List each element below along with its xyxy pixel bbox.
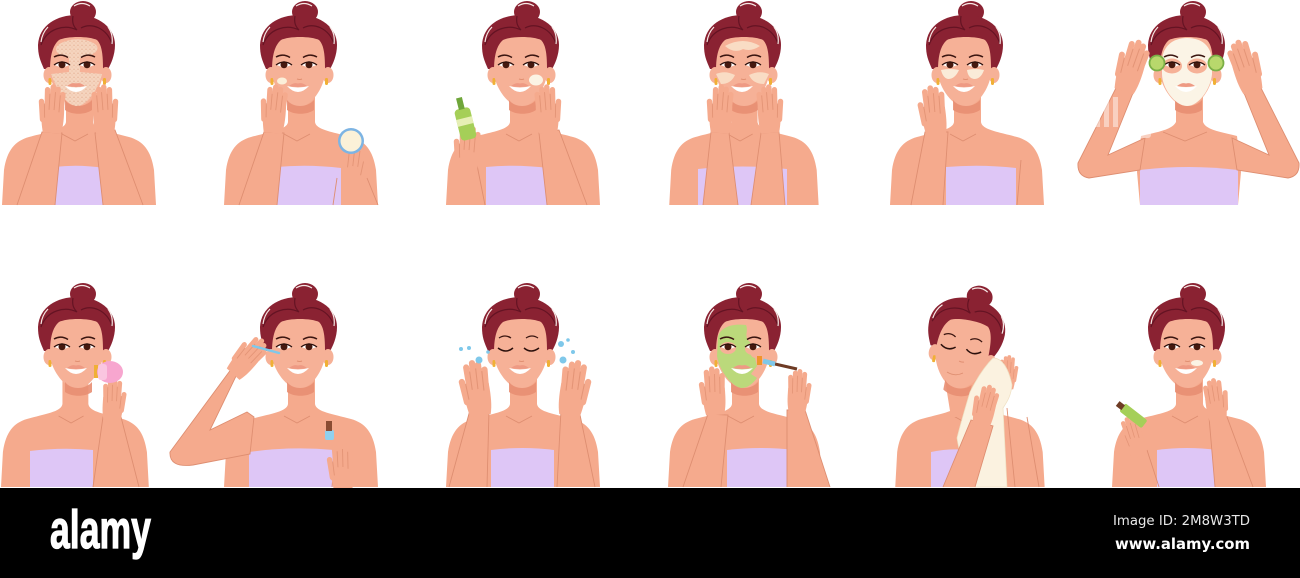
footer bar	[0, 488, 1300, 578]
towel	[249, 448, 334, 487]
left raised arm	[1078, 86, 1145, 178]
towel	[486, 166, 548, 205]
pink cleansing brush	[94, 361, 123, 383]
towel	[1140, 167, 1238, 205]
watermark ghost	[1095, 97, 1151, 138]
water droplets	[459, 338, 575, 364]
green mask	[717, 325, 757, 388]
hands on cheeks	[708, 86, 782, 134]
alamy logo: alamy	[50, 500, 151, 560]
figure 10: green clay mask with brush	[668, 283, 830, 487]
towel	[30, 449, 93, 487]
raised arm	[170, 368, 254, 465]
cucumber slices	[1150, 56, 1224, 70]
neck	[945, 380, 983, 417]
figure 5: under-eye patches	[890, 1, 1044, 205]
cream dab	[277, 78, 287, 84]
towel	[1157, 448, 1217, 487]
open hands	[459, 361, 591, 417]
green tube	[1115, 400, 1148, 428]
right raised arm	[1232, 86, 1299, 178]
towel	[54, 166, 104, 205]
green bottle	[451, 96, 477, 141]
figure 12: applying cream from tube	[1112, 283, 1266, 487]
towel	[727, 448, 794, 487]
cream dab	[1191, 360, 1203, 366]
figure 6: face mask and cucumbers	[1078, 1, 1299, 205]
scrub on face	[51, 39, 102, 106]
towel	[276, 166, 341, 205]
towel	[491, 448, 554, 487]
cream jar	[338, 128, 364, 154]
towel wrap	[931, 449, 969, 487]
figure 4: foam on face	[669, 1, 819, 205]
cotton pad	[529, 74, 543, 86]
towel	[698, 166, 787, 205]
towel	[946, 166, 1016, 205]
figure 8: serum dropper	[170, 283, 378, 491]
hands	[1111, 39, 1266, 95]
figure 9: rinsing with water	[446, 283, 600, 487]
figure 7: facial cleansing brush	[1, 283, 149, 487]
dropper	[253, 346, 279, 353]
figure 11: drying face with towel	[895, 277, 1045, 487]
serum bottle	[325, 421, 334, 440]
image id: Image ID: 2M8W3TD	[1113, 514, 1250, 529]
figure 1: exfoliating scrub	[2, 1, 156, 205]
hands on cheeks	[40, 86, 117, 134]
foam patches	[716, 41, 769, 84]
eye patches	[941, 69, 984, 79]
figure 2: applying cream with jar	[224, 1, 378, 205]
drying cloth	[957, 358, 1012, 487]
figure 3: cleanser bottle and cotton pad	[446, 1, 600, 205]
white mask	[1162, 38, 1212, 106]
website: www.alamy.com	[1115, 535, 1250, 553]
mask brush	[757, 356, 797, 369]
